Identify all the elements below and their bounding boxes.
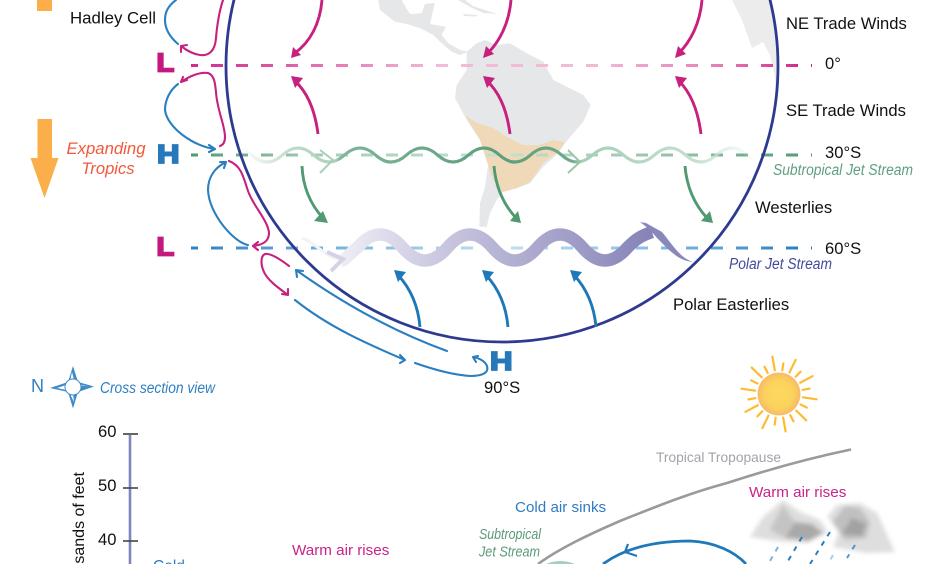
60 degrees south dashed line bbox=[191, 246, 812, 250]
compass and cross section label: N bbox=[31, 376, 44, 396]
compass and cross section label: Cross section view bbox=[100, 380, 217, 397]
polar jet stream wave bbox=[302, 222, 693, 271]
label: Warm air rises left: Warm air rises bbox=[292, 542, 390, 559]
label: 60S latitude: 60°S bbox=[825, 239, 861, 258]
polar easterly wind arrows: blue bbox=[394, 270, 596, 327]
label: equator latitude: 0° bbox=[825, 54, 841, 73]
label: Tropical Tropopause: Tropical Tropopause bbox=[656, 449, 781, 465]
label: Cold air sinks: Cold air sinks bbox=[515, 499, 607, 516]
map: subtropical dry zone over South America bbox=[465, 115, 565, 192]
orange arrow stub at top bbox=[37, 0, 52, 11]
altitude axis: 60 bbox=[98, 422, 116, 441]
label: Subtropical Jet Stream cross section: Subtropical bbox=[479, 527, 542, 543]
globe outline bbox=[226, 0, 778, 342]
pressure symbol: high at 90S: H bbox=[490, 347, 513, 376]
label: Expanding Tropics: Expanding bbox=[66, 139, 146, 158]
label: Polar Easterlies: Polar Easterlies bbox=[673, 295, 789, 314]
label: 30S latitude: 30°S bbox=[825, 143, 861, 162]
subtropical jet stream wave bbox=[220, 148, 778, 173]
pressure symbol: low at 60S: L bbox=[156, 232, 174, 261]
30 degrees south dashed line bbox=[191, 154, 812, 156]
subtropical jet cross section top bbox=[546, 561, 575, 564]
label: Expanding Tropics: Tropics bbox=[81, 159, 135, 178]
label: Westerlies: Westerlies bbox=[755, 198, 832, 217]
compass and cross section label bbox=[31, 366, 217, 408]
altitude axis bbox=[71, 422, 138, 564]
label: SE Trade Winds: SE Trade Winds bbox=[786, 101, 906, 120]
label: Expanding Tropics bbox=[66, 139, 146, 178]
icon: storm clouds bbox=[750, 500, 895, 553]
label: Subtropical Jet Stream cross section bbox=[478, 527, 542, 560]
polar cell loop bbox=[295, 270, 487, 376]
equator dashed line bbox=[191, 64, 812, 67]
circulation arc arrow bbox=[603, 541, 746, 564]
trade wind arrows: pink bbox=[291, 0, 702, 134]
map: continents inside globe bbox=[378, 0, 778, 227]
label: Warm air rises right: Warm air rises bbox=[749, 484, 847, 501]
Hadley cell loops bbox=[165, 0, 289, 295]
altitude axis: 50 bbox=[98, 476, 116, 495]
orange arrow: expanding tropics bbox=[30, 119, 58, 198]
label: Hadley Cell: Hadley Cell bbox=[70, 8, 156, 28]
icon: sun bbox=[741, 357, 817, 431]
label: Subtropical Jet Stream: Subtropical Jet Stream bbox=[773, 162, 913, 179]
pressure symbol: low at equator: L bbox=[156, 48, 174, 77]
label: 90S latitude: 90°S bbox=[484, 378, 520, 397]
label: NE Trade Winds: NE Trade Winds bbox=[786, 14, 907, 33]
label: Subtropical Jet Stream cross section: Jet Stream bbox=[478, 544, 540, 560]
altitude axis: 40 bbox=[98, 530, 116, 549]
icon: rain streaks bbox=[770, 532, 855, 564]
tropical tropopause line bbox=[538, 450, 851, 564]
label: Polar Jet Stream: Polar Jet Stream bbox=[729, 256, 832, 273]
westerly wind arrows: green bbox=[302, 166, 713, 223]
pressure symbol: high at 30S: H bbox=[157, 140, 180, 169]
